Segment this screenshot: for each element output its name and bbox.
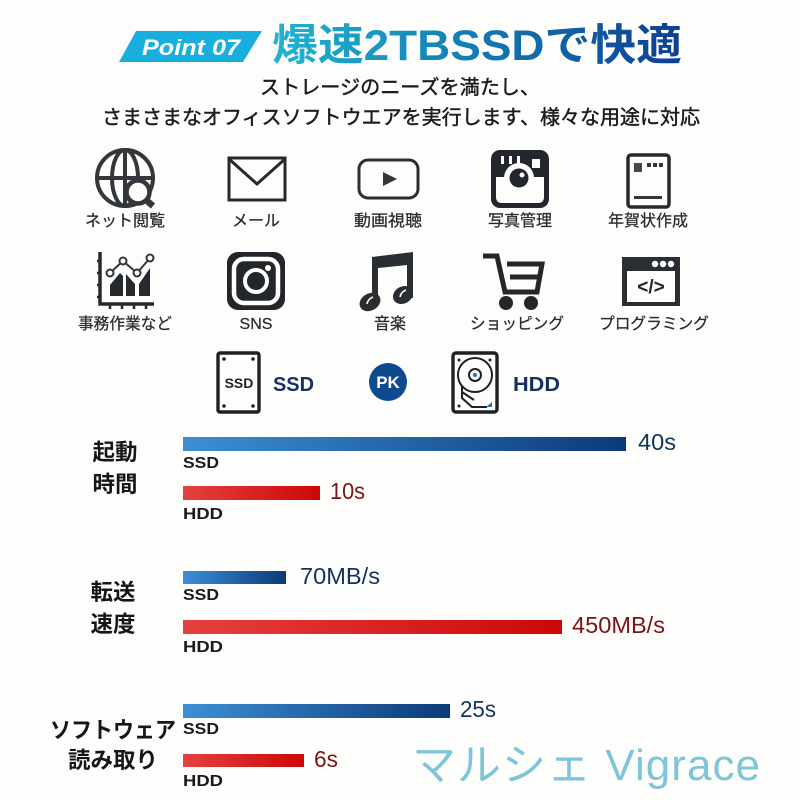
subtitle: ストレージのニーズを満たし、	[260, 76, 540, 99]
label: programming: プログラミング	[599, 315, 709, 333]
row label: software loading: 読み取り	[68, 748, 158, 773]
icon: code window	[622, 257, 680, 306]
title: 爆速2TBSSDで快適	[272, 22, 682, 70]
bar: software SSD	[183, 696, 496, 738]
bar: software HDD	[183, 746, 338, 790]
icon: instagram	[227, 252, 285, 310]
row label: transfer speed: 速度	[90, 612, 136, 637]
bar: boot SSD: 40s	[638, 429, 676, 455]
badge: Point 07: Point 07	[142, 35, 242, 60]
icon: code window: </>	[637, 277, 665, 298]
bar: transfer SSD	[183, 563, 380, 604]
badge: Point 07	[119, 31, 262, 62]
icon: mail	[229, 158, 285, 200]
label: net browsing: ネット閲覧	[85, 212, 165, 230]
heading: HDD: HDD	[513, 374, 560, 396]
icon: postcard	[628, 155, 669, 207]
label: new year card: 年賀状作成	[608, 212, 688, 230]
label: video: 動画視聴	[354, 212, 422, 230]
bar: boot SSD	[183, 429, 676, 472]
badge: PK: PK	[376, 373, 401, 392]
icon: music notes	[356, 252, 416, 315]
label: office work: 事務作業など	[78, 315, 172, 333]
row label: software loading: ソフトウェア	[50, 718, 176, 743]
row label: transfer speed: 転送	[90, 580, 136, 605]
row label: boot time	[92, 440, 138, 497]
bar: boot HDD: HDD	[183, 506, 223, 523]
subtitle	[102, 76, 700, 129]
bar: software SSD: SSD	[183, 721, 219, 738]
bar: boot HDD: 10s	[330, 478, 365, 504]
badge: PK	[369, 363, 407, 401]
icon: SSD drive	[218, 353, 259, 412]
subtitle: さまさまなオフィスソフトウエアを実行します、様々な用途に対応	[102, 106, 700, 129]
label: photo management: 写真管理	[488, 212, 552, 230]
label: mail: メール	[232, 213, 280, 230]
icon: video	[359, 160, 418, 198]
icon: SSD drive: SSD	[225, 375, 253, 391]
icon: HDD drive	[453, 353, 497, 412]
bar: transfer HDD: HDD	[183, 639, 223, 656]
bar: transfer HDD: 450MB/s	[572, 612, 665, 638]
row label: boot time: 起動	[92, 440, 138, 465]
bar: software HDD: HDD	[183, 773, 223, 790]
row label: transfer speed	[90, 580, 136, 637]
bar: transfer SSD: SSD	[183, 587, 219, 604]
bar: boot SSD: SSD	[183, 455, 219, 472]
label: music: 音楽	[374, 315, 406, 333]
icon: camera	[491, 150, 549, 208]
bar: software HDD: 6s	[314, 746, 338, 772]
watermark: マルシェ Vigrace	[412, 741, 760, 790]
icon: shopping cart	[483, 256, 542, 310]
icon: chart	[97, 252, 154, 309]
icon: globe with magnifier	[97, 150, 153, 206]
bar: boot HDD	[183, 478, 365, 523]
bar: software SSD: 25s	[460, 696, 496, 722]
row label: software loading	[50, 718, 176, 773]
label: shopping: ショッピング	[470, 315, 564, 333]
bar: transfer HDD	[183, 612, 665, 656]
bar: transfer SSD: 70MB/s	[300, 563, 380, 589]
row label: boot time: 時間	[92, 472, 138, 497]
heading: SSD: SSD	[273, 374, 314, 396]
label: SNS: SNS	[240, 316, 272, 333]
